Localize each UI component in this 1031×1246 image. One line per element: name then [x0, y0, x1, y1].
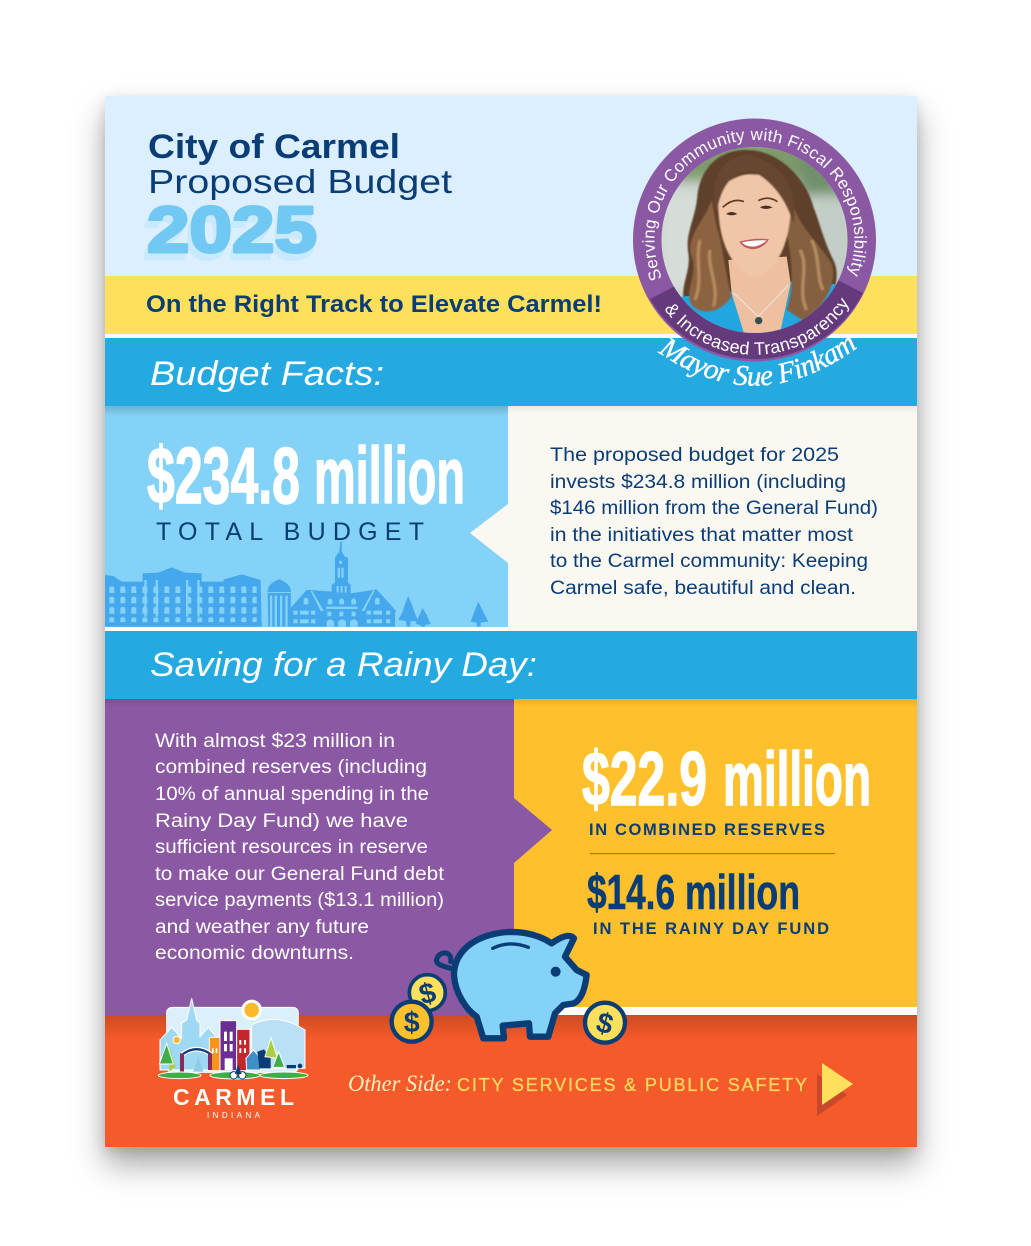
badge: mayor portrait ring [633, 118, 876, 386]
label: total budget: TOTAL BUDGET [156, 518, 424, 546]
panel: budget description: The proposed budget for 2025 [550, 445, 839, 466]
panel: reserves explanation: With almost $23 million in [155, 731, 395, 752]
year 2025: 2025 [147, 193, 317, 266]
banner: tagline [105, 276, 917, 334]
ring text: top: Serving Our Community with Fiscal Responsibility [642, 128, 867, 280]
heading band: Saving for a Rainy Day: Saving for a Rainy Day: [150, 646, 537, 684]
panel: reserves explanation: to make our General Fund debt [155, 864, 445, 885]
other side topic: CITY SERVICES & PUBLIC SAFETY [457, 1075, 807, 1095]
photo: Mayor Sue Finkam [662, 147, 848, 333]
icon: piggy bank with coins: $ [416, 976, 440, 1011]
panel: reserves explanation [105, 699, 552, 1015]
panel: reserves explanation: economic downturns. [155, 943, 354, 964]
figure: $22.9 million: $22.9 [582, 737, 707, 822]
heading band: Budget Facts: Budget Facts: [150, 355, 384, 393]
figure: $22.9 million: million [723, 737, 871, 822]
icon: piggy bank with coins [392, 932, 625, 1043]
figure: $14.6 million: million [685, 866, 800, 920]
signature: Mayor Sue Finkam: Mayor Sue Finkam [657, 338, 858, 386]
panel: reserves explanation: sufficient resources in reserve [155, 837, 428, 858]
banner: tagline: On the Right Track to Elevate Carmel! [146, 291, 602, 318]
panel: budget description: Carmel safe, beautiful and clean. [550, 578, 856, 599]
panel: budget description: to the Carmel community: Keeping [550, 551, 868, 572]
panel: total budget [105, 406, 508, 627]
ring text: bottom: & Increased Transparency [666, 298, 850, 355]
label: in the rainy day fund: IN THE RAINY DAY FUND [593, 920, 829, 938]
title: Proposed Budget [148, 164, 453, 201]
figure: $234.8 million: million [314, 431, 465, 520]
figure: $14.6 million [587, 866, 800, 920]
logo: Carmel Indiana [158, 998, 308, 1120]
panel: reserves explanation: and weather any future [155, 917, 369, 938]
heading band: Saving for a Rainy Day [105, 631, 917, 699]
title: City of Carmel [148, 128, 400, 166]
figure: $234.8 million: $234.8 [147, 431, 300, 520]
panel: reserves explanation: 10% of annual spending in the [155, 784, 429, 805]
year 2025: 2025 [143, 200, 315, 273]
panel: reserves explanation: service payments ($13.1 million) [155, 890, 444, 911]
panel: header background [105, 96, 917, 276]
panel: reserves figures [514, 699, 917, 1015]
panel: reserves explanation: combined reserves (including [155, 757, 427, 778]
figure: $14.6 million: $14.6 [587, 866, 675, 920]
logo: Carmel Indiana: INDIANA [207, 1111, 261, 1120]
label: in combined reserves: IN COMBINED RESERVES [589, 821, 825, 839]
panel: budget description [470, 406, 917, 631]
panel: budget description: $146 million from the General Fund) [550, 498, 878, 519]
arrow [817, 1063, 853, 1116]
icon: piggy bank with coins: $ [593, 1006, 617, 1041]
panel: reserves explanation: Rainy Day Fund) we have [155, 811, 408, 832]
figure: $22.9 million [582, 737, 871, 822]
panel: budget description: invests $234.8 million (including [550, 472, 846, 493]
logo: Carmel Indiana: CARMEL [173, 1084, 294, 1110]
other side label: Other Side: [348, 1071, 452, 1096]
icon: piggy bank with coins: $ [404, 1007, 420, 1039]
panel: budget description: in the initiatives that matter most [550, 525, 854, 546]
panel: footer [105, 1015, 917, 1147]
skyline illustration [105, 542, 488, 627]
heading band: Budget Facts [105, 338, 917, 406]
title [148, 128, 453, 201]
